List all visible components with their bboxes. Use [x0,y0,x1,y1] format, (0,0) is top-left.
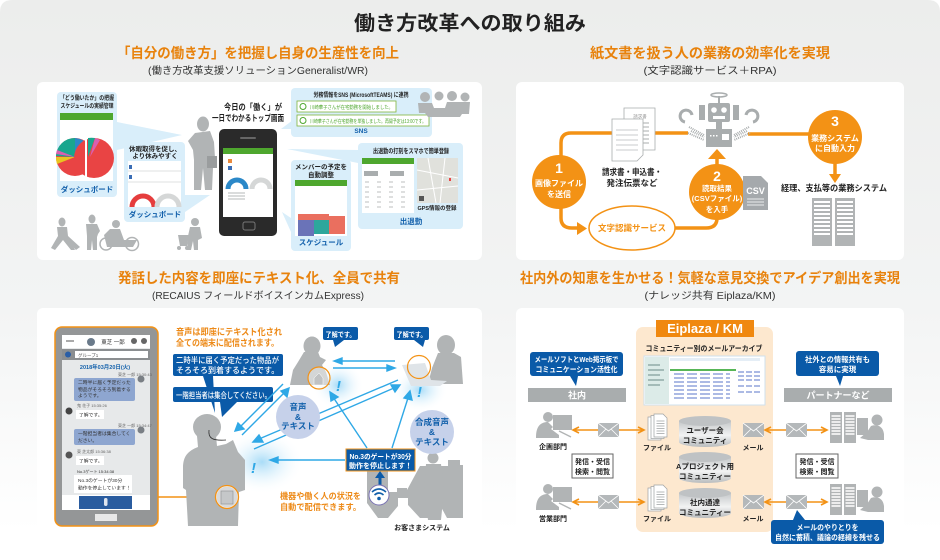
bubble: partner: 容易に実現 [819,364,857,374]
bubble: reply 2 [394,327,429,347]
box: send right: 検索・閲覧 [800,467,834,476]
tablet: グループ1 [78,352,99,359]
caption: documents line 2: 発注伝票など [606,178,658,188]
icon: file 2 [648,485,667,511]
icon: file 1 [648,414,667,440]
callout: schedule: 自動調整 [308,170,334,179]
bubble: reply 2: 了解です。 [396,330,426,339]
gates silhouette [367,452,463,520]
heading: 紙文書を扱う人の業務の効率化を実現 [590,45,830,61]
oval: OCR service: 文字認識サービス [598,223,666,233]
callout: dashboard 1: スケジュールの実績管理 [60,102,114,110]
callout: attendance [287,143,463,229]
badge: speaker device [216,486,238,508]
caption: 今日の「働く」が [224,102,282,112]
callout: SNS: 川崎華子さんが在宅勤務を開始しました。 [310,104,393,111]
tablet: 物品がそろそろ到着する [78,386,131,393]
callout: dashboard 1: 「どう働いたか」の把握 [60,94,114,102]
callout: dashboard 2: ダッシュボード [129,209,181,219]
exclamations [251,378,422,477]
icon: partner server and person 2 [830,484,884,515]
callout: attendance: 出退勤 [400,216,423,226]
bubble: partner: 社外との情報共有も [805,354,870,364]
caption: business system: 経理、支払等の業務システム [781,183,887,193]
callout: schedule: メンバーの予定を [295,163,347,171]
callout: dashboard 2: より休みやすく [132,151,178,160]
tablet: 東芝 一郎 15:30:43 [118,371,153,377]
label: file 1: ファイル [643,444,671,452]
box: send right: 発信・受信 [800,457,834,466]
arrow: heads [577,149,841,235]
step 2: 読取結果 [702,183,732,193]
icon: businessman on phone [188,116,217,190]
badge: woman device [308,367,330,389]
oval: OCR service [589,206,675,250]
glow 2 [312,361,364,409]
cylinder: user community [679,416,731,447]
text: auto notice: 機器や働く人の状況を [280,491,361,501]
icon: mail 1 [743,423,764,437]
icon: partner server and person 1 [830,412,884,443]
alert box: 動作を停止します！ [349,461,412,470]
connector: tablet to badge [158,496,217,498]
heading: 「自分の働き方」を把握し自身の生産性を向上 [117,45,399,61]
arrow: flow lines [561,133,835,228]
cylinder: user community: コミュニティ [683,436,727,445]
man with laptop silhouette [402,335,463,386]
callout: dashboard 2 [124,142,210,222]
cylinder: project community: Aプロジェクト用 [676,461,734,471]
step 3: 3 [831,113,839,129]
arrows: blue communication lines [235,358,412,463]
bar: internal [528,388,626,402]
circle: synthesized voice and text: テキスト [415,437,449,447]
label: mail 2: メール [742,516,764,523]
circle: voice and text: 音声 [289,402,307,412]
exclamations: ! [251,460,256,477]
step 1: 画像ファイル [535,178,583,188]
callout: attendance: GPS情報の登録 [417,204,457,212]
cylinder: internal notice community: 社内通達 [690,497,720,507]
cylinder: internal notice community [679,488,731,518]
heading: 発話した内容を即座にテキスト化、全員で共有 [118,270,400,286]
arrows and mails: left [573,423,827,509]
step 1: 1 [555,160,563,176]
archive area: Eiplaza / KM [667,321,743,336]
tablet: 東芝 一郎 15:34:47 [118,422,153,428]
bubble: internal [530,352,623,386]
speech bubble 1: 二時半に届く予定だった物品が [176,355,279,365]
tablet: 鬼 花子 15:35:26 [77,402,108,408]
callout: SNS: SNS [354,128,368,135]
box: send right [796,454,838,478]
panel: voice incom [37,270,482,540]
callout: SNS: 川崎華子さんが在宅勤務を単独しました。再開予定は13:00です。 [310,118,426,125]
icon: commuter silhouettes [51,214,202,250]
circle: voice and text: & [295,412,301,422]
label: mail 1: メール [742,445,764,452]
alert box: No.3のゲートが30分 [350,452,412,461]
glow [220,430,304,494]
speech bubble 1 [173,354,283,413]
woman silhouette [290,336,330,385]
icon: robot [680,93,758,147]
icon: CSV file [743,176,768,210]
title: 働き方改革への取り組み [354,12,586,35]
subheading: (働き方改革支援ソリューションGeneralist/WR) [148,64,368,77]
step 3: に自動入力 [815,143,855,153]
label: customer system: お客さまシステム [394,523,450,532]
tablet: ださい。 [78,437,97,444]
tablet: 了解です。 [79,458,103,464]
cylinder: user community: ユーザー会 [686,425,724,435]
heading: 社内外の知恵を生かせる！気軽な意見交換でアイデア創出を実現 [520,270,900,286]
text: auto notice line 2: 自動で配信できます。 [280,502,361,512]
bubble: internal: メールソフトとWeb掲示板で [534,354,619,364]
bubble: accumulation [771,510,884,544]
cylinder: project community: コミュニティー [679,472,731,481]
archive area: コミュニティー別のメールアーカイブ [646,343,763,353]
bubble: reply 1: 了解です。 [326,330,356,339]
text: orange note line 2: 全ての端末に配信されます。 [176,337,279,348]
label: planning: 企画部門 [539,442,567,451]
cylinder: internal notice community: コミュニティー [679,508,731,517]
subheading: (RECAIUS フィールドボイスインカムExpress) [152,290,364,302]
step 3: 業務システム [811,133,859,143]
step 2 [689,164,745,220]
bar: partner: パートナーなど [806,390,870,400]
icon: documents [612,108,655,161]
tablet [55,327,158,526]
tablet: 了解です。 [79,412,103,418]
icon: mail 2 [743,495,764,509]
speech bubble 2 [173,387,273,417]
callout: dashboard 1 [56,92,182,197]
icon: servers [812,198,855,246]
callout: dashboard 2: 休暇取得を促し、 [129,144,181,153]
bubble: partner [796,351,879,386]
alert box [346,449,415,471]
circle: synthesized voice and text: & [429,427,435,437]
speaker silhouette [183,414,245,526]
callout: dashboard 1: ダッシュボード [61,184,113,194]
icon: meeting silhouettes [418,91,470,117]
panel: self-awareness productivity: 一日でわかるトップ画面 [212,113,284,123]
speech bubble 2: 一階担当者は集合してください。 [176,390,271,400]
tablet: ようです。 [78,393,102,399]
icon: planning department PC [536,412,572,438]
tablet: 東芝 一郎 [101,338,125,346]
icon: sales department PC [536,484,572,510]
icon: documents: 請求書 [633,113,647,120]
label: sales: 営業部門 [539,514,567,523]
step 1 [532,155,586,209]
tablet: 2018年03月20日(火) [80,363,130,371]
archive area [636,320,773,532]
label: file 2: ファイル [643,515,671,523]
step 1: を送信 [547,189,571,199]
callout: SNS [281,88,432,137]
box: send left [572,454,613,478]
step 2: (CSVファイル) [692,194,743,203]
tablet: No.3ゲート 15:34:38 [77,468,115,474]
text: orange note: 音声は即座にテキスト化され [176,326,282,337]
tablet: 動作を停止しています！ [78,484,131,492]
callout: attendance: 出退勤の打刻をスマホで簡単登録 [373,146,449,155]
tablet: 東 芝太郎 15:36:38 [77,448,112,454]
circle: voice and text: テキスト [281,421,315,431]
tablet: 一階担当者は集合してく [78,430,130,437]
bar: partner [784,388,892,402]
subheading: (文字認識サービス＋RPA) [644,64,776,77]
phone [219,129,277,236]
icon: CSV file: CSV [746,186,765,196]
screenshot [644,356,765,405]
subheading: (ナレッジ共有 Eiplaza/KM) [644,289,776,302]
bubble: accumulation: メールのやりとりを [796,522,858,532]
glow 3 [392,368,448,412]
bar: internal: 社内 [568,390,586,400]
panel: knowledge sharing [516,270,904,544]
bubble: accumulation: 自然に蓄積、議論の経緯を残せる [775,532,880,542]
callout: schedule: スケジュール [299,238,344,247]
cylinder: project community [676,452,734,483]
box: send left: 検索・閲覧 [575,467,610,476]
circle: voice and text [276,395,320,439]
box: send left: 発信・受信 [575,457,610,466]
arrow: up from sensor [375,471,385,486]
circle: synthesized voice and text: 合成音声 [415,417,449,427]
step 3 [808,110,862,164]
step 2: を入手 [706,204,729,214]
bubble: reply 1 [323,327,358,347]
speech bubble 1: そろそろ到着するようです。 [176,365,279,375]
step 2: 2 [713,168,721,184]
bubble: internal: コミュニケーション活性化 [536,364,618,374]
callout: schedule [282,160,351,251]
caption: documents: 請求書・申込書・ [602,167,662,177]
circle: synthesized voice and text [410,410,454,454]
tablet: 二時半に届く予定だった [78,379,131,386]
exclamations: ! [417,384,422,401]
callout: SNS: 労務情報をSNS (MicrosoftTEAMS) に連携 [314,91,408,99]
exclamations: ! [336,378,341,395]
panel: self-awareness productivity [37,45,482,260]
icon: wifi sensor [369,485,389,505]
panel: document processing [516,45,904,260]
tablet: No.3のゲートが30分 [78,477,122,484]
